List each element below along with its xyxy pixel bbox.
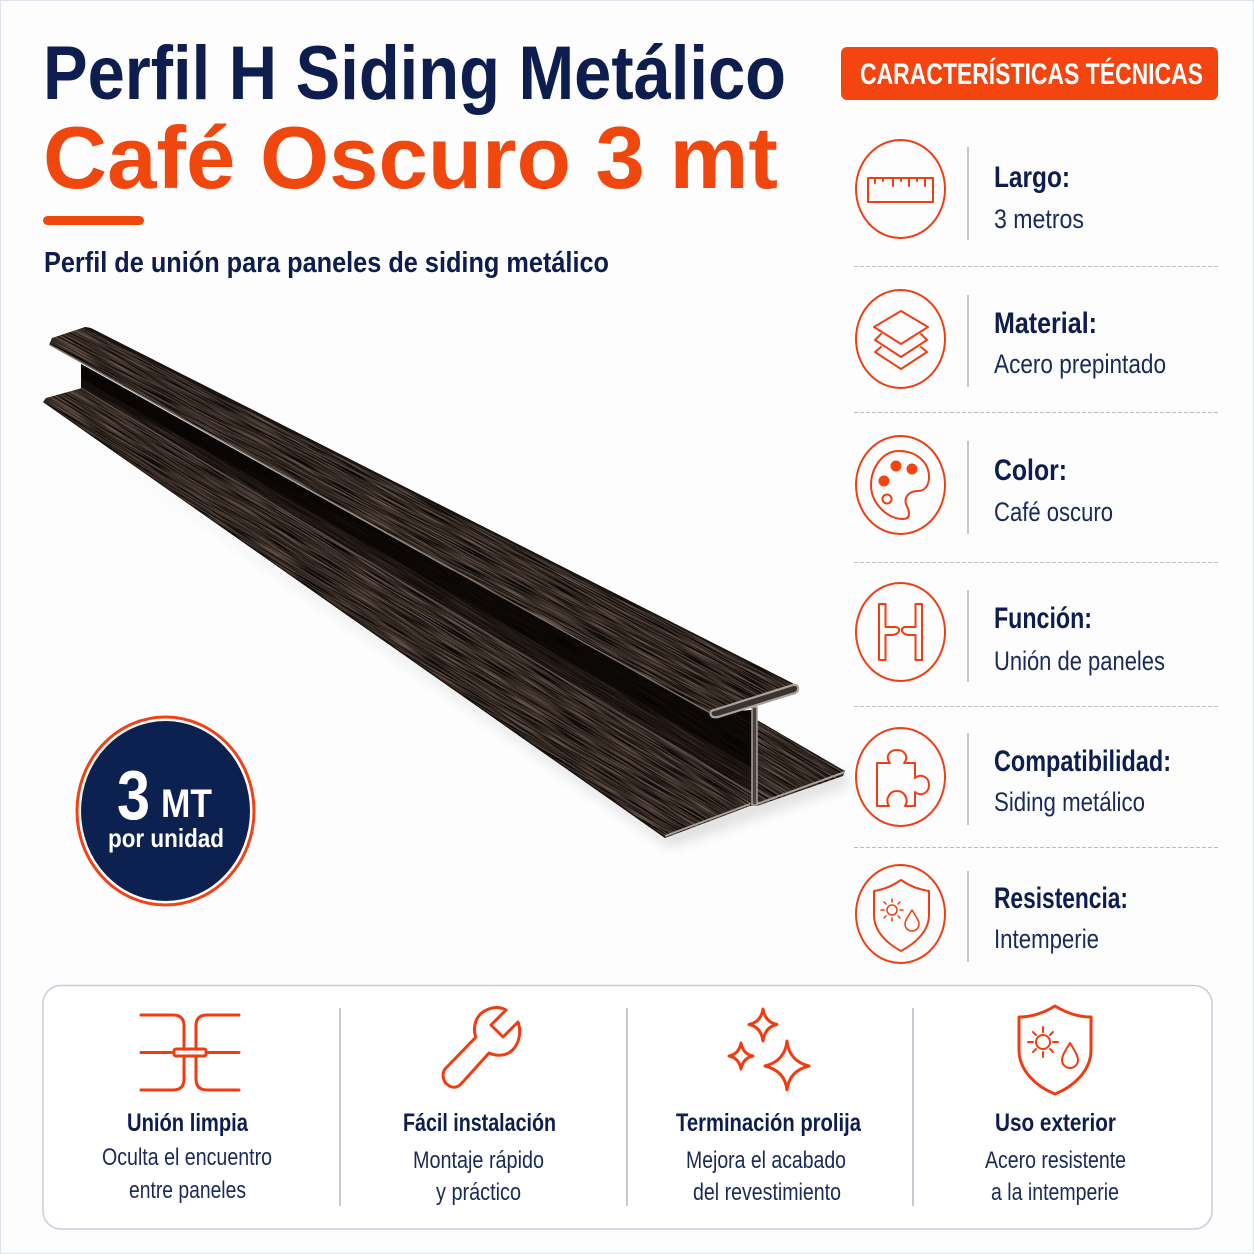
title: Perfil H Siding Metálico	[43, 31, 786, 116]
icon: shield with sun and drop	[856, 865, 945, 963]
text: largo	[994, 161, 1084, 234]
benefit: uso exterior: Acero resistente	[985, 1147, 1126, 1174]
benefit: fácil instalación: y práctico	[436, 1179, 521, 1206]
web base	[81, 364, 752, 793]
subtitle: Perfil de unión para paneles de siding metálico	[44, 247, 609, 279]
benefit: unión limpia: Oculta el encuentro	[102, 1144, 272, 1171]
icon: sparkles	[729, 1009, 809, 1090]
icon: shield	[1019, 1006, 1091, 1094]
lower flange	[43, 388, 845, 838]
text: función: Función:	[994, 602, 1092, 635]
icon: wrench	[443, 1008, 520, 1087]
text: compatibilidad: Siding metálico	[994, 787, 1145, 817]
text: resistencia	[994, 882, 1128, 954]
text: compatibilidad	[994, 745, 1171, 817]
benefit: fácil instalación	[403, 1008, 556, 1206]
header: características técnicas	[841, 47, 1218, 100]
spec row: resistencia	[856, 865, 1128, 963]
shadow	[60, 420, 850, 846]
text: material	[994, 307, 1166, 379]
icon: H profile	[856, 583, 945, 681]
icon: puzzle	[856, 728, 945, 826]
benefit: fácil instalación: Montaje rápido	[413, 1147, 544, 1174]
title underline	[43, 216, 144, 225]
badge: 3 MT por unidad	[77, 717, 254, 905]
title: Café Oscuro 3 mt	[43, 108, 778, 207]
benefit: uso exterior: a la intemperie	[991, 1179, 1119, 1206]
text: función: Unión de paneles	[994, 646, 1165, 676]
benefit: fácil instalación: Fácil instalación	[403, 1109, 556, 1137]
benefit: unión limpia	[102, 1015, 272, 1204]
benefit: terminación prolija: del revestimiento	[693, 1179, 841, 1206]
spec row: color	[856, 436, 1113, 534]
text: compatibilidad: Compatibilidad:	[994, 745, 1171, 778]
front web	[752, 707, 757, 805]
benefit: uso exterior	[985, 1006, 1126, 1206]
front end of top flange	[710, 685, 798, 717]
icon: joint	[141, 1015, 239, 1090]
text: resistencia: Intemperie	[994, 924, 1099, 954]
text: función	[994, 602, 1165, 676]
benefit: terminación prolija	[676, 1009, 862, 1206]
badge: 3 MT por unidad: MT	[161, 782, 212, 826]
text: material: Acero prepintado	[994, 349, 1166, 379]
spec row: función	[856, 583, 1165, 682]
icon: ruler	[856, 140, 945, 238]
text: largo: 3 metros	[994, 204, 1084, 234]
spec row: material	[856, 290, 1166, 388]
title	[43, 31, 786, 207]
benefit: terminación prolija: Terminación prolija	[676, 1109, 862, 1137]
benefit: terminación prolija: Mejora el acabado	[686, 1147, 846, 1174]
badge: 3 MT por unidad: 3	[117, 756, 150, 834]
spec row: compatibilidad	[856, 728, 1171, 826]
benefit: unión limpia: Unión limpia	[127, 1109, 249, 1137]
icon: palette	[856, 436, 945, 534]
text: resistencia: Resistencia:	[994, 882, 1128, 915]
panel: benefits	[43, 986, 1212, 1229]
text: material: Material:	[994, 307, 1097, 340]
web	[81, 364, 752, 793]
benefit: uso exterior: Uso exterior	[995, 1109, 1116, 1137]
product image: H profile	[43, 327, 850, 848]
text: largo: Largo:	[994, 161, 1070, 194]
spec row: largo	[856, 140, 1084, 240]
text: color: Color:	[994, 454, 1067, 487]
text: color	[994, 454, 1113, 527]
badge: 3 MT por unidad: por unidad	[108, 823, 224, 853]
top flange	[49, 327, 794, 713]
text: color: Café oscuro	[994, 497, 1113, 527]
benefit: unión limpia: entre paneles	[129, 1177, 246, 1204]
icon: layers	[856, 290, 945, 388]
